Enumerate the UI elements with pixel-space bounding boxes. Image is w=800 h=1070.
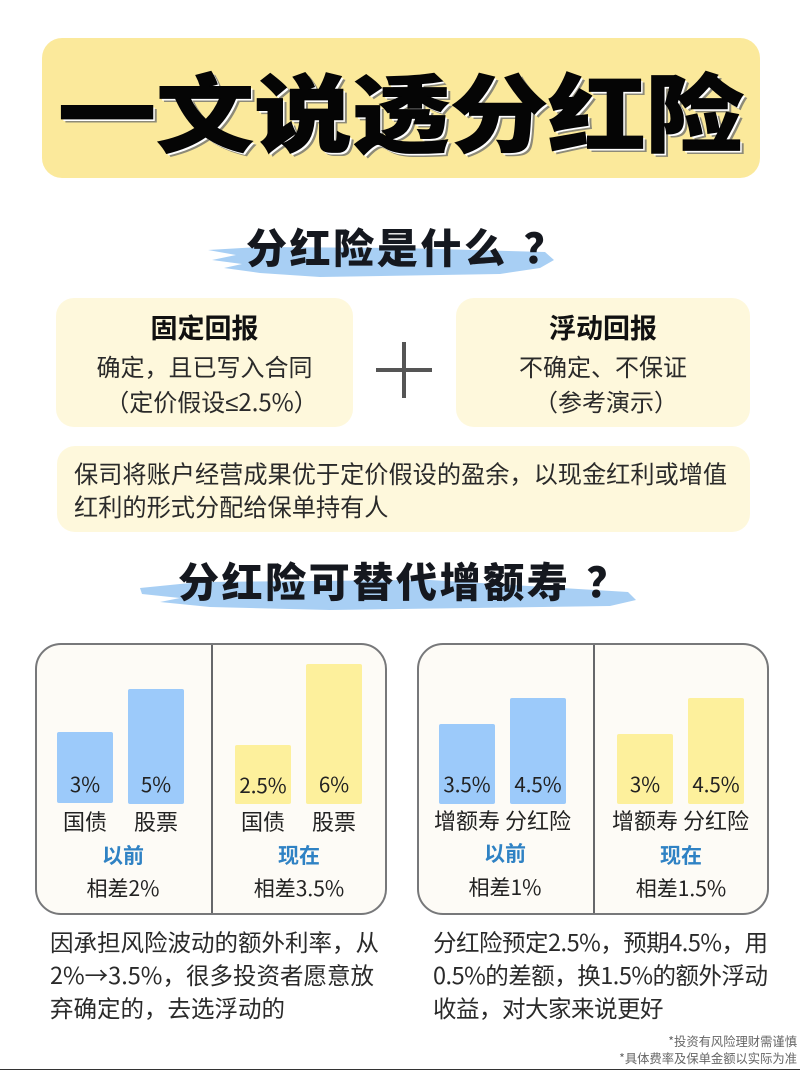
footnotes xyxy=(619,1032,797,1067)
bottom edge xyxy=(0,1069,800,1070)
difference: 相差1% xyxy=(468,872,542,902)
period label: 现在 xyxy=(660,840,702,870)
card text xyxy=(96,348,318,418)
definition text: 保司将账户经营成果优于定价假设的盈余，以现金红利或增值 红利的形式分配给保单持有人 xyxy=(74,455,727,523)
bar: now bonds xyxy=(235,745,291,804)
label: 增额寿 xyxy=(434,804,500,836)
value: 3.5% xyxy=(443,768,491,798)
panel: bonds vs stocks xyxy=(35,643,387,915)
value: 4.5% xyxy=(692,768,740,798)
note: right: 分红险预定2.5%，预期4.5%，用 0.5%的差额，换1.5%的额外浮动 收益，对大家来说更好 xyxy=(433,924,768,1024)
period label: 以前 xyxy=(102,840,144,870)
note: left: 因承担风险波动的额外利率，从 2%→3.5%，很多投资者愿意放 弃确定的，去选浮动的 xyxy=(50,924,379,1024)
icon: plus xyxy=(376,342,432,398)
card text: 不确定、不保证 xyxy=(519,348,687,383)
card text: 确定，且已写入合同 xyxy=(96,348,312,383)
difference: 相差3.5% xyxy=(254,873,344,903)
card heading: 浮动回报 xyxy=(549,307,657,346)
period label: 现在 xyxy=(278,840,320,870)
difference: 相差1.5% xyxy=(636,873,726,903)
bar: before stocks xyxy=(128,689,184,804)
bar: before participating xyxy=(510,698,566,804)
brush stroke xyxy=(208,247,554,277)
heading: what is it xyxy=(208,215,567,277)
footnotes: *投资有风险理财需谨慎 xyxy=(668,1032,797,1050)
title banner xyxy=(42,38,760,178)
heading: replace xyxy=(140,549,636,610)
label: 分红险 xyxy=(683,804,749,836)
card: fixed return xyxy=(56,298,353,427)
brush stroke xyxy=(140,580,636,610)
value: 5% xyxy=(141,768,171,798)
period label: 以前 xyxy=(484,838,526,868)
label: 分红险 xyxy=(505,804,571,836)
difference: 相差2% xyxy=(86,873,160,903)
heading text: 分红险可替代增额寿 ？ xyxy=(178,549,630,609)
divider xyxy=(593,645,595,913)
heading text: 分红险是什么 ？ xyxy=(246,215,567,275)
card text xyxy=(519,348,687,418)
label: 股票 xyxy=(312,805,356,837)
definition card xyxy=(57,446,750,532)
bar: now stocks xyxy=(306,664,362,804)
label: 增额寿 xyxy=(612,804,678,836)
value: 4.5% xyxy=(514,768,562,798)
value: 3% xyxy=(630,768,660,798)
card text: （参考演示） xyxy=(534,383,678,418)
value: 3% xyxy=(70,768,100,798)
divider xyxy=(211,645,213,913)
bar: before whole life xyxy=(439,724,495,804)
footnotes: *具体费率及保单金额以实际为准 xyxy=(619,1049,797,1067)
bar: now participating xyxy=(688,698,744,804)
label: 国债 xyxy=(63,805,107,837)
card: floating return xyxy=(456,298,750,427)
bar: now whole life xyxy=(617,734,673,804)
title: 一文说透分红险 xyxy=(58,47,744,171)
label: 股票 xyxy=(134,805,178,837)
panel: whole life vs participating xyxy=(417,643,769,915)
value: 2.5% xyxy=(239,769,287,799)
card text: （定价假设≤2.5%） xyxy=(105,383,318,418)
card heading: 固定回报 xyxy=(150,307,258,346)
value: 6% xyxy=(319,768,349,798)
bar: before bonds xyxy=(57,732,113,803)
label: 国债 xyxy=(241,805,285,837)
